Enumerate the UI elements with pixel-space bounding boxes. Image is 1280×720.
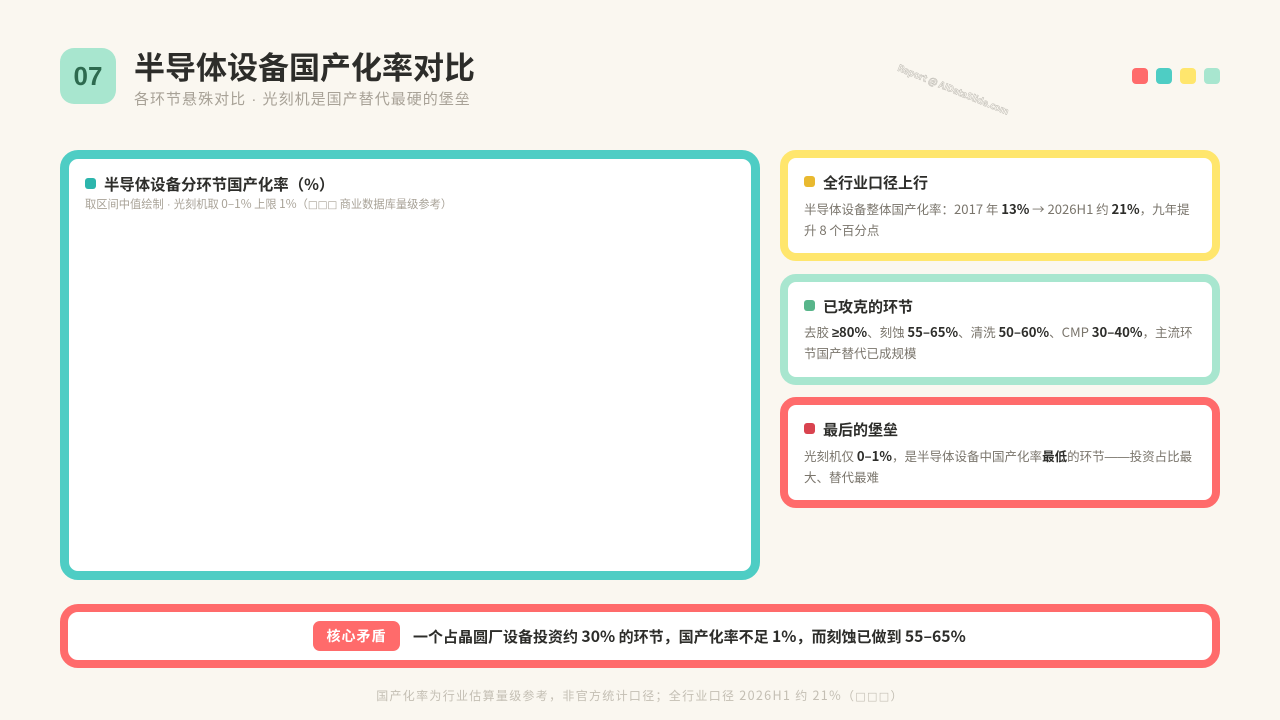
heading: 已攻克的环节 (823, 296, 913, 316)
panel: last fortress (780, 397, 1220, 508)
subtitle: 各环节悬殊对比 · 光刻机是国产替代最硬的堡垒 (134, 88, 471, 109)
tag: core contradiction: 核心矛盾 (326, 626, 386, 646)
footer note: 国产化率为行业估算量级参考，非官方统计口径；全行业口径 2026H1 约 21%（□□□） (376, 685, 904, 704)
chart heading: 半导体设备分环节国产化率（%） (104, 173, 334, 195)
icon: yellow marker (804, 176, 815, 187)
decorative colour chips (1132, 68, 1220, 84)
body text: 去胶 ≥80%、刻蚀 55–65%、清洗 50–60%、CMP 30–40%，主流环节国产替代已成规模 (804, 322, 1192, 362)
heading: 全行业口径上行 (823, 172, 928, 193)
body text: 光刻机仅 0–1%，是半导体设备中国产化率最低的环节——投资占比最大、替代最难 (804, 446, 1192, 486)
heading: 最后的堡垒 (823, 419, 898, 440)
icon: red marker (804, 423, 815, 434)
watermark: Report @ AIDataSlide.com (896, 60, 1011, 118)
panel: chart (60, 150, 760, 580)
panel: industry-wide trend (780, 150, 1220, 261)
badge: section number (60, 48, 116, 104)
chart note: 取区间中值绘制 · 光刻机取 0–1% 上限 1%（□□□ 商业数据库量级参考） (85, 195, 452, 212)
icon: green marker (804, 300, 815, 310)
icon: chart heading marker (85, 178, 96, 189)
body text: 半导体设备整体国产化率：2017 年 13% → 2026H1 约 21%，九年提升 8 个百分点 (804, 199, 1190, 239)
tag: core contradiction (313, 621, 400, 651)
panel: core contradiction banner (60, 604, 1220, 668)
banner text: 一个占晶圆厂设备投资约 30% 的环节，国产化率不足 1%，而刻蚀已做到 55–65% (413, 624, 966, 647)
panel: conquered segments (780, 274, 1220, 384)
badge: section number: 07 (74, 61, 102, 91)
title: 半导体设备国产化率对比 (134, 43, 475, 88)
